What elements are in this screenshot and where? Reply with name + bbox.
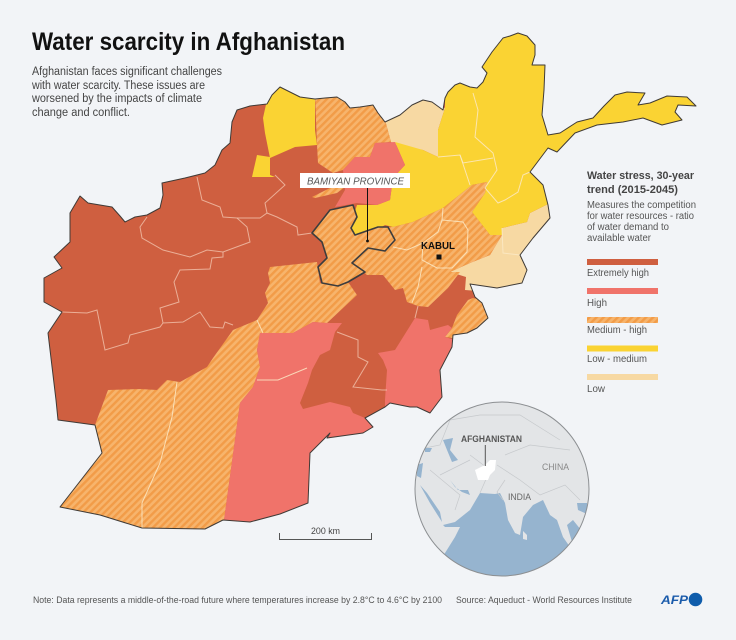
legend description [587, 200, 696, 244]
legend description: available water [587, 233, 652, 244]
region: medium to high water stress [50, 95, 502, 535]
intro text [31, 66, 222, 119]
callout: Bamiyan province: BAMIYAN PROVINCE [307, 176, 404, 188]
legend heading: trend (2015-2045) [587, 184, 678, 196]
province boundaries [62, 175, 418, 390]
sea [443, 493, 580, 576]
legend description: of water demand to [587, 222, 669, 233]
Afghanistan highlight [475, 460, 496, 480]
legend item: low-medium: Low - medium [587, 354, 647, 365]
legend heading [587, 170, 695, 196]
region: extremely high water stress [44, 33, 696, 529]
source: Source: Aqueduct - World Resources Institute [456, 595, 632, 605]
legend item: extremely high: Extremely high [587, 268, 649, 279]
map of Afghanistan [44, 25, 705, 535]
legend description: for water resources - ratio [587, 211, 694, 222]
globe label: Afghanistan: AFGHANISTAN [461, 434, 522, 444]
legend item: high: High [587, 298, 607, 309]
locator globe [414, 402, 590, 576]
intro text: with water scarcity. These issues are [31, 80, 205, 92]
AFP logo [660, 593, 702, 607]
title: Water scarcity in Afghanistan [32, 28, 345, 56]
globe label: China: CHINA [542, 462, 569, 472]
region: low water stress [385, 98, 555, 295]
region: high water stress [222, 142, 455, 535]
region: low to medium water stress [252, 25, 705, 237]
intro text: worsened by the impacts of climate [31, 93, 202, 105]
intro text: change and conflict. [32, 107, 130, 119]
legend item: high [587, 288, 658, 309]
legend item: low-medium [587, 346, 658, 365]
Kabul label and marker: KABUL [421, 240, 456, 252]
legend heading: Water stress, 30-year [587, 170, 695, 182]
legend [587, 170, 696, 395]
Bamiyan province outline [312, 205, 395, 286]
country border [44, 33, 696, 529]
footnote: Note: Data represents a middle-of-the-road future where temperatures increase by 2.8°C to 4.6°C by 2100 [33, 595, 442, 605]
intro text: Afghanistan faces significant challenges [32, 66, 222, 78]
legend item: low [587, 374, 658, 395]
scale bar [280, 526, 372, 540]
legend item: extremely high [587, 259, 658, 279]
Kabul label and marker [421, 240, 456, 260]
legend item: low: Low [587, 384, 606, 395]
Sri Lanka [523, 531, 527, 540]
legend item: medium-high: Medium - high [587, 325, 647, 336]
legend description: Measures the competition [587, 200, 696, 211]
globe label: India: INDIA [508, 492, 531, 502]
land borders [415, 415, 580, 510]
AFP logo: AFP [660, 593, 689, 607]
legend item: medium-high [587, 317, 658, 336]
scale bar: 200 km [311, 526, 340, 536]
callout: Bamiyan province [300, 173, 410, 242]
